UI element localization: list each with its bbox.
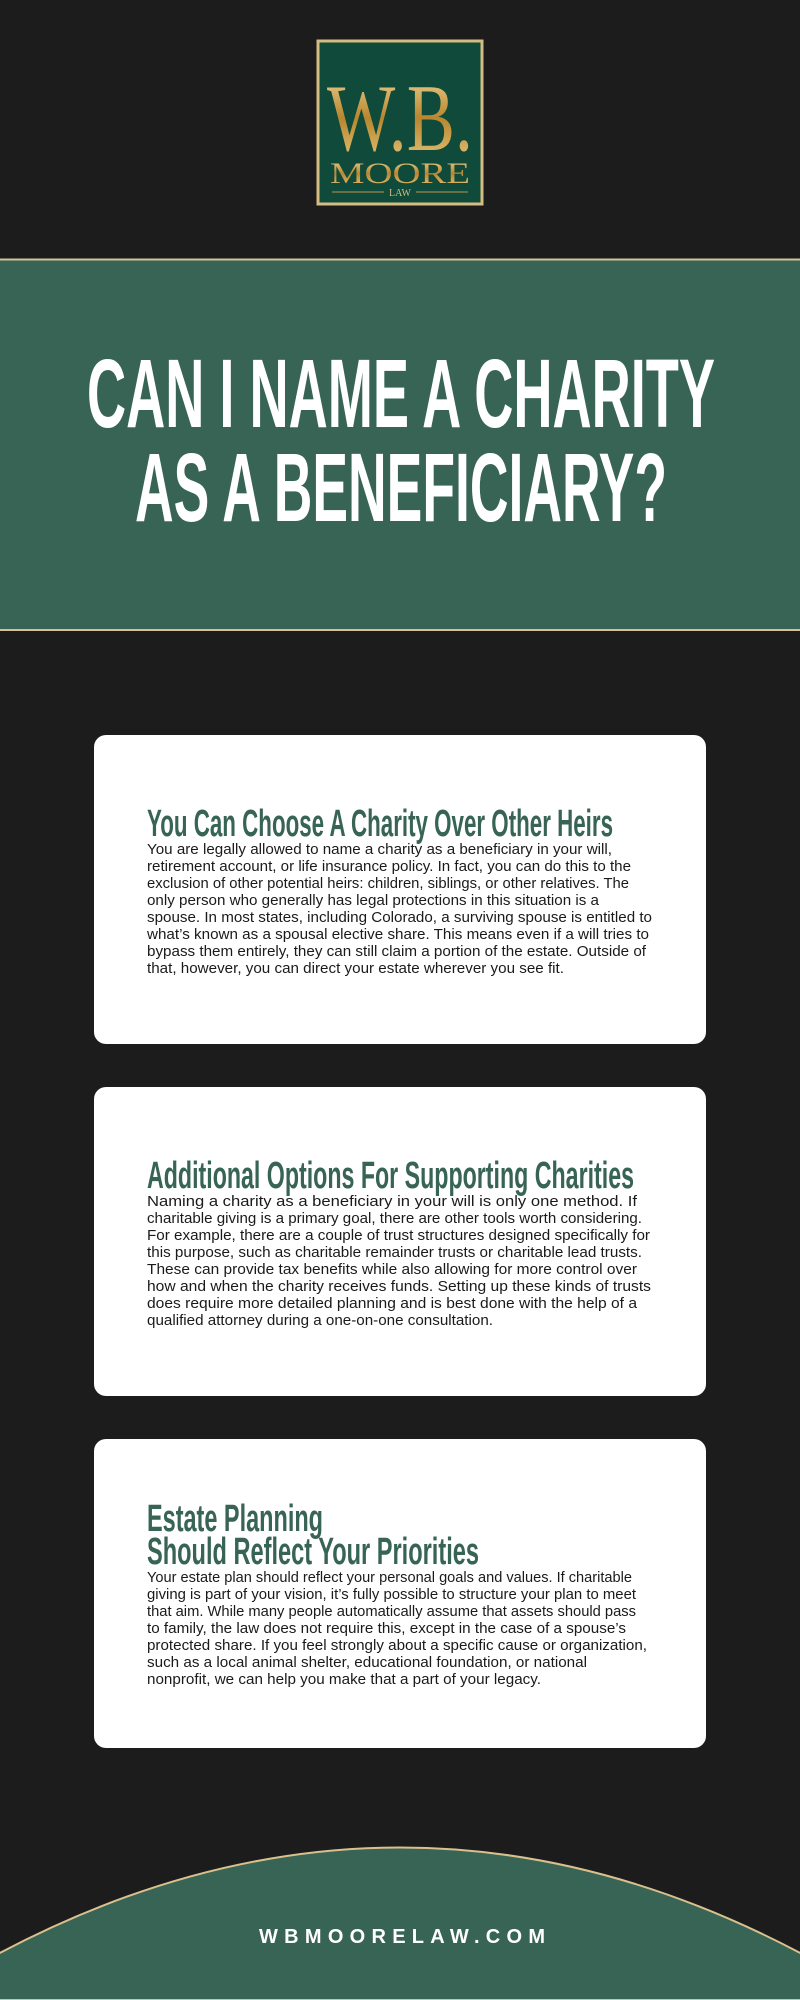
text block 2: how and when the charity receives funds. Setting up these kinds of trusts — [147, 1278, 651, 1295]
text block 3: such as a local animal shelter, educational foundation, or national — [147, 1654, 587, 1671]
text block 3: that aim. While many people automatically assume that assets should pass — [147, 1603, 636, 1620]
text block 3 — [147, 1569, 647, 1688]
panel: card 1 — [94, 735, 706, 1044]
text block 2: does require more detailed planning and is best done with the help of a — [147, 1295, 638, 1312]
text block 3: protected share. If you feel strongly about a specific cause or organization, — [147, 1637, 647, 1654]
title — [87, 339, 715, 542]
text block 1 — [146, 841, 652, 977]
panel: card 3 — [94, 1439, 706, 1748]
logo: LAW — [389, 188, 412, 199]
logo: W.B. — [327, 65, 473, 171]
text block 1: that, however, you can direct your estate wherever you see fit. — [147, 960, 564, 977]
text block 2: For example, there are a couple of trust structures designed specifically for — [147, 1227, 650, 1244]
text block 2: this purpose, such as charitable remainder trusts or charitable lead trusts. — [147, 1244, 642, 1261]
heading 3: Estate Planning — [147, 1498, 323, 1540]
text block 2: Naming a charity as a beneficiary in your will is only one method. If — [147, 1193, 638, 1210]
text block 1: retirement account, or life insurance policy. In fact, you can do this to the — [147, 858, 631, 875]
text block 3: to family, the law does not require this, except in the case of a spouse’s — [147, 1620, 626, 1637]
text block 1: only person who generally has legal protections in this situation is a — [147, 892, 600, 909]
text block 3: giving is part of your vision, it’s fully possible to structure your plan to meet — [147, 1586, 637, 1603]
heading 3 — [147, 1498, 479, 1573]
text block 1: what’s known as a spousal elective share. This means even if a will tries to — [146, 926, 649, 943]
text block 3: nonprofit, we can help you make that a part of your legacy. — [147, 1671, 541, 1688]
text block 1: exclusion of other potential heirs: children, siblings, or other relatives. The — [147, 875, 629, 892]
logo: MOORE — [330, 157, 470, 190]
text block 2: These can provide tax benefits while also allowing for more control over — [147, 1261, 637, 1278]
title banner — [0, 259, 800, 630]
footer arc — [0, 1848, 800, 2000]
heading 3: Should Reflect Your Priorities — [147, 1531, 479, 1573]
text block 3: Your estate plan should reflect your personal goals and values. If charitable — [147, 1569, 632, 1586]
footer url: WBMOORELAW.COM — [259, 1926, 545, 1948]
logo — [318, 41, 482, 204]
panel: card 2 — [94, 1087, 706, 1396]
text block 2 — [147, 1193, 651, 1329]
text block 1: bypass them entirely, they can still claim a portion of the estate. Outside of — [147, 943, 647, 960]
text block 2: charitable giving is a primary goal, there are other tools worth considering. — [147, 1210, 642, 1227]
text block 2: qualified attorney during a one-on-one consultation. — [147, 1312, 493, 1329]
text block 1: You are legally allowed to name a charity as a beneficiary in your will, — [147, 841, 612, 858]
text block 1: spouse. In most states, including Colorado, a surviving spouse is entitled to — [147, 909, 652, 926]
